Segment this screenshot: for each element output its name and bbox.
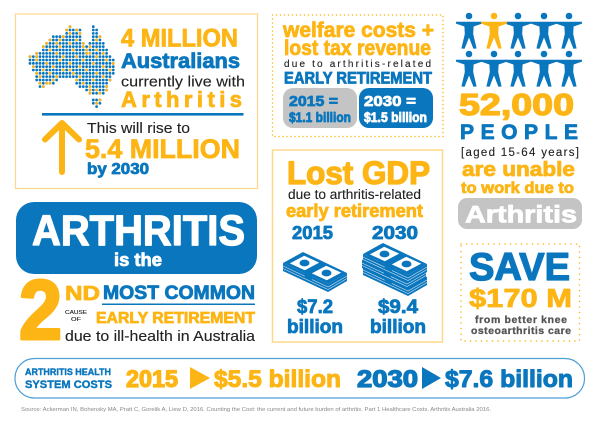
value: 7.2 billion xyxy=(287,297,343,338)
value: 5.5 billion: $5.5 billion xyxy=(214,366,341,393)
text: to work due to: to work due to xyxy=(461,180,574,197)
text: aged 15-64 years: [aged 15-64 years] xyxy=(461,147,579,159)
text: most common: MOST COMMON xyxy=(103,283,255,304)
value: 7.6 billion: $7.6 billion xyxy=(445,366,573,393)
heading: lost tax revenue: lost tax revenue xyxy=(284,36,431,60)
value: 9.4 billion: $9.4 xyxy=(378,297,418,318)
heading: welfare costs: welfare costs + xyxy=(282,18,434,42)
panel: 4 million Australians xyxy=(16,14,258,188)
text: cause of: CAUSE xyxy=(65,310,87,316)
stat: 52,000: 52,000 xyxy=(459,87,574,122)
panel: welfare costs xyxy=(272,15,443,136)
arrow: 2015 xyxy=(190,367,210,389)
value: 9.4 billion: billion xyxy=(370,317,426,338)
heading: arthritis: ARTHRITIS xyxy=(32,207,245,255)
text: due to arthritis-related: due to arthritis-related xyxy=(284,59,431,70)
icon: second row of people xyxy=(456,51,582,87)
text: is the: is the xyxy=(114,250,162,270)
panel: save 170 million xyxy=(461,244,580,341)
panel: 2nd most common xyxy=(19,263,256,357)
arrow: 2030 xyxy=(422,367,441,389)
panel: 52,000 people xyxy=(456,13,582,229)
text: 5.4 million: 5.4 MILLION xyxy=(85,134,240,164)
text: cause of: OF xyxy=(71,317,82,323)
text: due to ill-health: due to ill-health in Australia xyxy=(65,329,256,345)
text: Arthritis: Arthritis xyxy=(121,87,242,112)
text: early retirement: EARLY RETIREMENT xyxy=(284,70,432,88)
value: 2030: 2030 xyxy=(357,366,418,393)
text: cause of xyxy=(65,310,87,323)
panel: arthritis is the xyxy=(16,202,257,274)
box: 2030 cost: 2030 = xyxy=(364,93,416,110)
value: 9.4 billion xyxy=(370,297,426,338)
text: from better knee: from better knee xyxy=(475,314,567,326)
text: are unable: are unable xyxy=(462,159,575,181)
source note: Source: Ackerman IN, Bohensky MA, Pratt C, Gorelik A, Liew D, 2016. Counting the Cost: the current and future burden of arthritis. Part 1 Healthcare Costs. Arthritis Australia 2016. xyxy=(21,407,491,413)
text: Australians: Australians xyxy=(121,50,240,73)
badge: arthritis: Arthritis xyxy=(465,202,577,228)
box: 2030 cost: $1.5 billion xyxy=(364,110,427,125)
value: 7.2 billion: billion xyxy=(287,317,343,338)
text: by 2030: by 2030 xyxy=(87,161,149,178)
text: early retirement: early retirement xyxy=(286,201,423,221)
label: arthritis health system costs: SYSTEM COSTS xyxy=(25,379,112,391)
text: people: PEOPLE xyxy=(460,121,578,144)
icon: dotted map of Australia xyxy=(30,27,113,107)
text: this will rise to: This will rise to xyxy=(87,120,190,137)
badge: arthritis xyxy=(458,198,582,229)
stat: 2: 2 xyxy=(19,263,62,357)
stat suffix: ND: ND xyxy=(65,283,100,305)
panel: health system costs xyxy=(15,358,584,398)
heading: 4 million: 4 MILLION xyxy=(121,24,238,52)
label: 2030: 2030 xyxy=(372,223,418,243)
label: arthritis health system costs: ARTHRITIS HEALTH xyxy=(25,367,111,378)
panel: lost GDP xyxy=(272,150,442,342)
icon: up arrow xyxy=(45,123,79,172)
value: 7.2 billion: $7.2 xyxy=(297,297,333,318)
text: osteoarthritis care: osteoarthritis care xyxy=(471,325,571,337)
heading: save: SAVE xyxy=(469,246,570,289)
icon: money stack xyxy=(362,243,427,296)
text: due to arthritis-related: due to arthritis-related xyxy=(288,187,421,202)
heading: lost GDP: Lost GDP xyxy=(287,155,430,191)
label: 2015: 2015 xyxy=(292,223,333,243)
box: 2015 cost: 2015 = xyxy=(289,93,338,110)
box: 2030 cost xyxy=(359,88,433,128)
label: arthritis health system costs xyxy=(25,367,112,391)
text: currently live with: currently live with xyxy=(121,74,245,90)
icon: row of people xyxy=(456,13,582,49)
stat: 170 million: $170 M xyxy=(469,283,572,313)
icon: money bundle xyxy=(283,252,347,292)
text: early retirement: EARLY RETIREMENT xyxy=(96,310,255,327)
box: 2015 cost xyxy=(283,88,357,128)
box: 2015 cost: $1.1 billion xyxy=(289,110,351,125)
value: 2015: 2015 xyxy=(126,366,178,393)
